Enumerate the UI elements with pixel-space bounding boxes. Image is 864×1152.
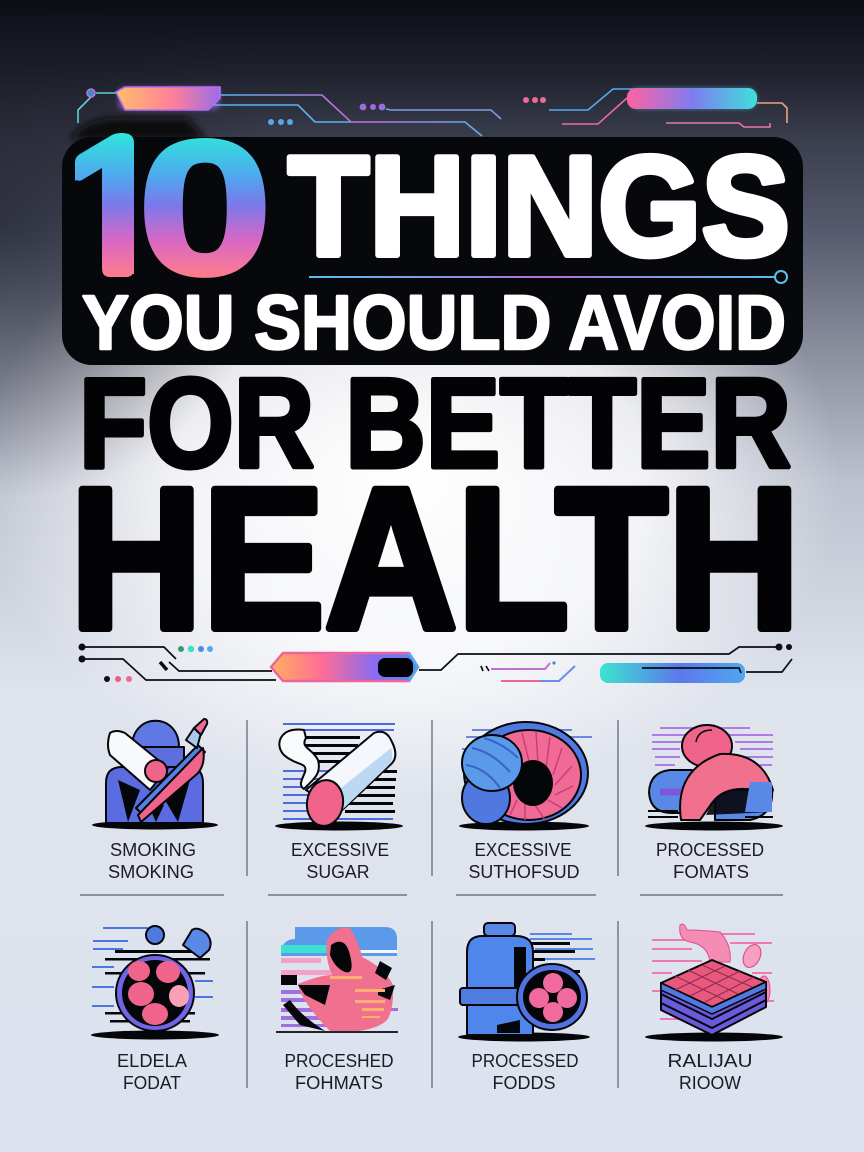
number 10: 1 <box>60 100 167 315</box>
labels row 1: SUGAR <box>306 862 370 882</box>
number 10: 0 <box>137 100 273 315</box>
labels row 1: PROCESSED <box>656 840 764 860</box>
labels row 2: ELDELA <box>117 1051 187 1071</box>
labels row 1: FOMATS <box>673 862 749 882</box>
labels row 1: SMOKING <box>110 840 196 860</box>
labels row 1: SMOKING <box>108 862 194 882</box>
labels row 1: EXCESSIVE <box>291 840 389 860</box>
number 10 <box>75 133 266 278</box>
labels row 2: PROCESSED <box>472 1051 578 1071</box>
lower circuit decoration <box>78 644 792 683</box>
labels row 2: FODDS <box>492 1073 556 1093</box>
dividers <box>80 720 783 1088</box>
panel divider line <box>309 271 787 283</box>
heading: health: HEALTH <box>70 446 800 671</box>
icon: pink creature <box>276 927 398 1033</box>
labels row 1: SUTHOFSUD <box>468 862 580 882</box>
top circuit decoration <box>70 87 787 140</box>
icon: bottle and disc <box>458 923 595 1042</box>
labels row 2: FODAT <box>123 1073 181 1093</box>
title panel <box>62 133 803 365</box>
icon: round cells <box>91 926 219 1040</box>
icon: cigarette <box>275 723 403 830</box>
labels row 1 <box>108 840 764 882</box>
icon: smoking <box>92 719 218 830</box>
labels row 2 <box>117 1051 752 1093</box>
heading: things: THINGS <box>288 127 790 286</box>
icon: layered grid <box>645 924 783 1042</box>
icon: donut and ball <box>459 722 592 830</box>
labels row 2: RALIJAU <box>668 1051 752 1071</box>
labels row 1: EXCESSIVE <box>474 840 572 860</box>
labels row 2: FOHMATS <box>295 1073 383 1093</box>
labels row 2: RIOOW <box>679 1073 741 1093</box>
icon: processed blobs <box>645 725 783 830</box>
heading: you should avoid: YOU SHOULD AVOID <box>82 280 786 366</box>
labels row 2: PROCESHED <box>284 1051 394 1071</box>
